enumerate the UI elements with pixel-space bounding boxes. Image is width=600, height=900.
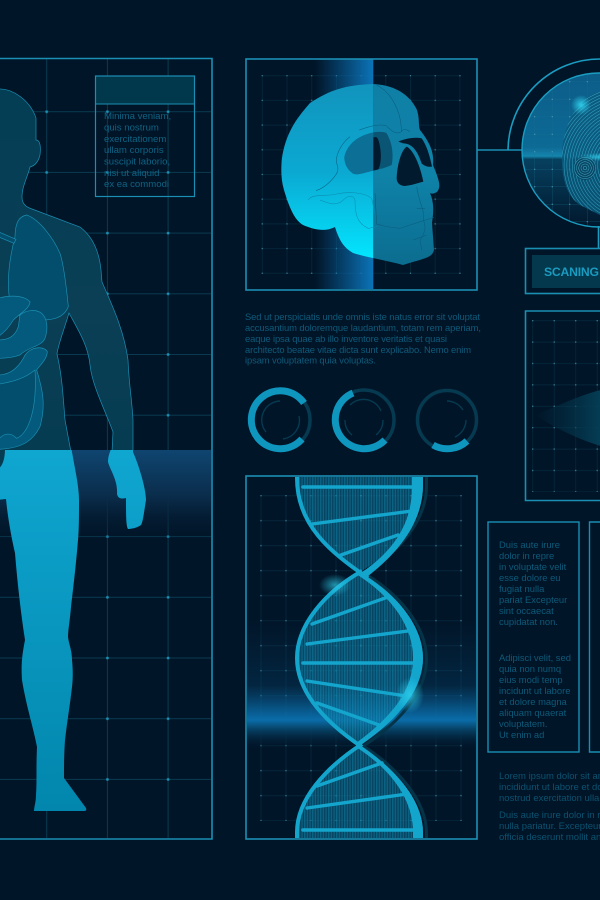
text box 1: Ut enim ad xyxy=(499,729,544,740)
ring 2 xyxy=(334,390,394,450)
paragraph: skull description: accusantium doloremque laudantium, totam rem aperiam, xyxy=(245,322,481,333)
eye socket left part xyxy=(344,132,373,174)
helix body fill xyxy=(297,470,423,845)
progress rings xyxy=(250,390,476,450)
note box: ex ea commodi xyxy=(104,179,169,190)
waveform grid xyxy=(532,320,600,492)
stomach xyxy=(0,311,47,358)
skull grid xyxy=(261,75,461,274)
scan band xyxy=(0,450,211,545)
fingerprint scanner xyxy=(508,59,600,248)
intestine xyxy=(0,348,47,449)
text box 1: aliquam quaerat xyxy=(499,707,567,718)
text box 1: incidunt ut labore xyxy=(499,685,570,696)
human silhouette lower xyxy=(0,446,146,811)
note box xyxy=(96,76,194,196)
strand shadows xyxy=(364,471,426,846)
text box 1: sint occaecat xyxy=(499,605,554,616)
panel: human body scan xyxy=(0,58,212,839)
text box 1: quia non numq xyxy=(499,663,561,674)
text box 1: voluptatem. xyxy=(499,718,547,729)
note box: ullam corporis xyxy=(104,145,164,156)
body panel grid xyxy=(0,59,211,838)
text box 1: eius modi temp xyxy=(499,674,563,685)
text box 1: esse dolore eu xyxy=(499,572,561,583)
body panel frame xyxy=(0,58,212,839)
skull cracks xyxy=(316,85,434,250)
bronchus xyxy=(0,232,16,243)
DNA glow spots xyxy=(320,574,349,595)
liver xyxy=(0,296,30,337)
glow spot xyxy=(571,95,591,115)
panel: DNA xyxy=(246,470,477,846)
skull frame xyxy=(246,59,477,290)
text box 1: et dolore magna xyxy=(499,696,568,707)
panel: skull scan xyxy=(246,59,477,290)
text box 1 xyxy=(488,522,579,752)
scanner disc xyxy=(522,73,600,227)
scanning label xyxy=(526,248,600,294)
text box 1: Duis aute irure xyxy=(499,539,560,550)
helix hatching xyxy=(297,470,423,845)
DNA glow band xyxy=(247,620,476,750)
DNA helix xyxy=(297,470,426,846)
text box 1: Adipisci velit, sed xyxy=(499,652,571,663)
scanning label: SCANING xyxy=(544,265,599,279)
human silhouette upper xyxy=(0,89,133,452)
skull illustration xyxy=(281,84,439,265)
text box 1: dolor in repre xyxy=(499,550,554,561)
connector to label xyxy=(598,226,600,248)
left strands xyxy=(297,470,368,845)
text box 1: cupidatat non. xyxy=(499,616,558,627)
waveform frame xyxy=(526,311,600,500)
note box: suscipit laborio, xyxy=(104,156,170,168)
outer arc xyxy=(508,59,600,150)
right strands xyxy=(356,470,423,845)
lung xyxy=(8,215,68,320)
text box 1: in voluptate velit xyxy=(499,561,567,572)
base pairs xyxy=(303,487,415,830)
pelvic fragment xyxy=(0,450,5,469)
intestine interior xyxy=(0,370,35,440)
text box 2 xyxy=(590,522,600,752)
internal organs xyxy=(0,215,68,469)
note box: quis nostrum xyxy=(104,122,159,134)
connector: skull to fingerprint xyxy=(477,149,522,151)
note box: exercitationem xyxy=(104,134,166,145)
nasal cavity xyxy=(397,147,423,186)
skull glow xyxy=(315,59,373,289)
waveform shape xyxy=(535,390,600,446)
note box: Minima veniam, xyxy=(104,111,171,122)
paragraph: skull description: ipsam voluptatem quia voluptas. xyxy=(245,354,376,366)
DNA frame xyxy=(246,476,477,839)
paragraph: skull description: architecto beatae vitae dicta sunt explicabo. Nemo enim xyxy=(245,344,471,355)
ring 3 xyxy=(418,390,476,450)
ring 1 xyxy=(250,390,310,450)
panel: waveform xyxy=(526,311,600,500)
paragraph: skull description: eaque ipsa quae ab illo inventore veritatis et quasi xyxy=(245,333,447,344)
text box 1: fugiat nulla xyxy=(499,583,545,594)
paragraph: skull description: Sed ut perspiciatis unde omnis iste natus error sit voluptat xyxy=(245,311,480,322)
DNA grid xyxy=(260,495,462,821)
note box: nisi ut aliquid xyxy=(104,168,159,179)
text box 1: pariat Excepteur xyxy=(499,594,567,605)
fingerprint xyxy=(562,92,600,215)
